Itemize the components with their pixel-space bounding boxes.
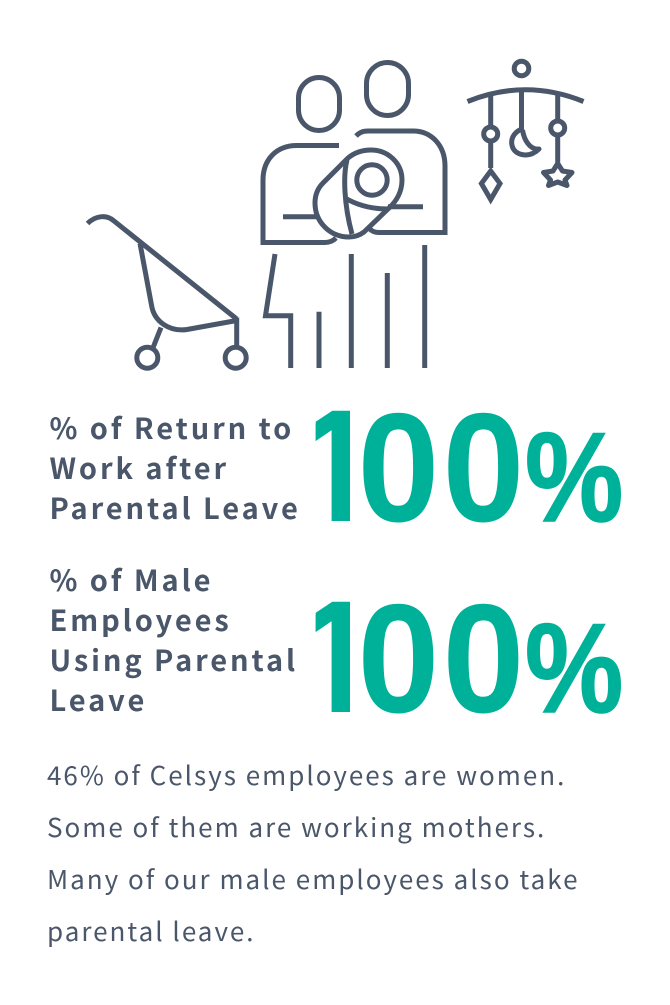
icon: baby mobile <box>468 61 584 200</box>
mother torso <box>263 146 339 242</box>
arms <box>283 207 423 217</box>
stat: return to work 100%: 0 <box>358 382 439 555</box>
heading: return to work: Work after <box>50 446 229 488</box>
legs <box>266 245 425 368</box>
mobile ring <box>514 61 529 76</box>
right ring <box>551 121 565 135</box>
body text: 46% of Celsys employees are women. <box>47 756 566 793</box>
left wheel <box>137 347 158 368</box>
handle and frame <box>88 217 237 319</box>
heading: male employees: Using Parental <box>50 638 298 680</box>
body text: Some of them are working mothers. <box>47 808 546 845</box>
stat: male employees 100% <box>316 602 621 714</box>
baby swaddle <box>315 150 402 237</box>
swaddle folds <box>345 160 388 234</box>
mother head <box>298 78 340 130</box>
body text: parental leave. <box>47 912 256 949</box>
father torso <box>356 131 445 232</box>
mobile arc <box>468 90 584 102</box>
left ring <box>484 127 498 141</box>
right wheel <box>225 347 246 368</box>
stat: male employees 100%: 0 <box>442 573 524 746</box>
heading: male employees: Employees <box>50 598 232 640</box>
icon: parents holding baby <box>263 62 445 368</box>
baby head <box>357 165 387 195</box>
father head <box>366 62 408 116</box>
stat: return to work 100% <box>316 410 621 523</box>
heading: male employees: % of Male <box>50 558 213 600</box>
left hanger with diamond <box>481 93 500 200</box>
stat: return to work 100%: 1 <box>293 381 379 554</box>
stat: return to work 100%: % <box>525 407 623 549</box>
heading: male employees: Leave <box>50 678 147 720</box>
icon: stroller <box>88 217 246 368</box>
heading: return to work: % of Return to <box>50 406 294 448</box>
heading: return to work: Parental Leave <box>50 486 301 528</box>
centre hanger with moon <box>512 90 539 155</box>
right hanger with star <box>544 92 572 186</box>
stat: return to work 100%: 0 <box>442 382 524 555</box>
stat: male employees 100%: 0 <box>358 573 439 746</box>
body text: Many of our male employees also take <box>47 860 580 897</box>
wheel strut <box>153 328 161 347</box>
stat: male employees 100%: % <box>525 598 623 740</box>
seat <box>140 244 237 346</box>
stat: male employees 100%: 1 <box>293 572 379 745</box>
